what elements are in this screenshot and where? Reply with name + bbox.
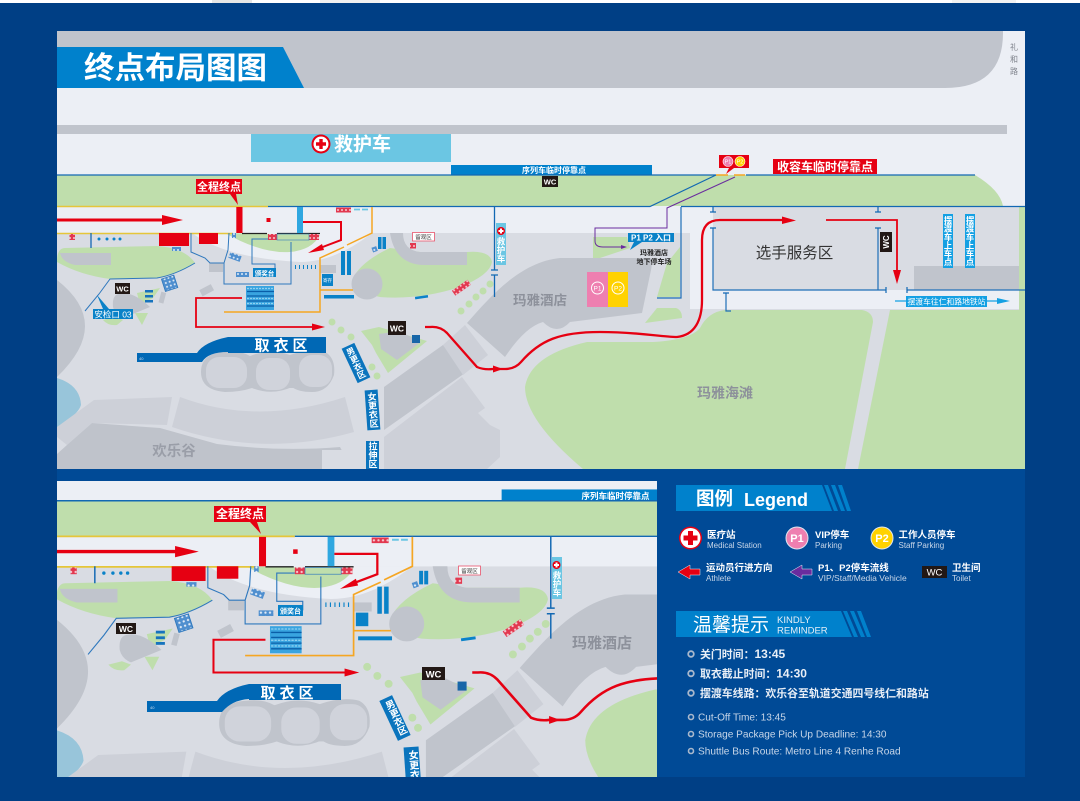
VIP parking: VIP停车 <box>815 529 850 541</box>
left dark buildings <box>57 280 85 377</box>
queue stop label: 序列车临时停靠点 <box>522 165 586 175</box>
underground parking text: 地下停车场 <box>636 257 672 266</box>
podium label: 颁奖台 <box>255 268 275 278</box>
road label <box>1010 42 1018 76</box>
medical station: 医疗站 <box>707 529 736 541</box>
WC sign left: WC <box>116 284 129 294</box>
podium label <box>278 605 303 616</box>
VIP parking: P1 <box>790 533 804 545</box>
English reminder list: Shuttle Bus Route: Metro Line 4 Renhe Road <box>698 746 901 758</box>
purple parking route <box>595 177 735 247</box>
pickup zone label: 取衣区 <box>260 684 318 702</box>
pickup zone label: 取衣区 <box>254 336 312 354</box>
vehicle route: P1、P2停车流线 <box>818 562 889 574</box>
green band <box>57 175 1003 206</box>
green dots <box>328 280 494 380</box>
hotel lawns <box>593 237 630 258</box>
WC vertical sign: WC <box>882 235 891 249</box>
Chinese reminder list: 摆渡车线路：欢乐谷至轨道交通四号线仁和路站 <box>700 686 929 700</box>
ambulance vertical label <box>496 223 506 265</box>
pickup zone label <box>147 684 341 712</box>
blue portable toilets <box>145 290 420 343</box>
road label: 路 <box>1010 66 1018 76</box>
parking entrance label <box>628 233 674 250</box>
shuttle boarding point 2: 摆渡车上车点 <box>965 215 975 267</box>
shuttle direction arrow <box>895 296 1010 307</box>
red zones <box>159 233 189 246</box>
men's changing label: 男更衣区 <box>344 345 368 381</box>
ground <box>57 233 1025 469</box>
VIP parking <box>786 527 850 550</box>
red arrow main straight <box>57 215 183 225</box>
podium label: 颁奖台 <box>280 606 301 616</box>
toilet: WC <box>927 568 943 578</box>
observation label <box>412 232 434 241</box>
security gate label <box>93 295 133 320</box>
ambulance vertical label <box>552 557 562 599</box>
service area ground <box>713 207 1019 290</box>
checker signs <box>70 208 471 296</box>
P1 P2 parking blocks <box>587 272 628 307</box>
finish label: 全程终点 <box>197 180 241 194</box>
podium stands <box>246 286 274 310</box>
Chinese reminder list <box>688 647 929 700</box>
panel: lower map detail <box>56 481 1080 801</box>
queue stop bar <box>451 165 652 175</box>
medical station <box>679 526 762 550</box>
staff parking: Staff Parking <box>898 541 944 550</box>
WC sign left <box>115 283 130 294</box>
finish line <box>236 207 242 233</box>
WC sign left: WC <box>119 624 133 634</box>
centre lawn <box>352 248 492 298</box>
English reminder list: Cut-Off Time: 13:45 <box>698 712 786 724</box>
cyan dashes <box>354 208 368 210</box>
WC sign left <box>116 623 136 634</box>
road label: 和 <box>1010 55 1018 64</box>
English reminder list: Storage Package Pick Up Deadline: 14:30 <box>698 730 887 740</box>
legend header <box>676 485 851 511</box>
staff parking <box>871 527 956 550</box>
red route to shuttle <box>826 220 897 272</box>
underground parking text: 玛雅酒店 <box>640 248 668 257</box>
P1 P2 parking blocks: P2 <box>614 286 622 292</box>
P1 P2 parking blocks: P1 <box>594 286 602 292</box>
women's changing label <box>404 746 422 791</box>
site base plan <box>57 165 1025 469</box>
enlarged plan <box>56 489 1080 801</box>
toilet: 卫生间 <box>952 562 981 574</box>
podium label <box>253 268 276 278</box>
red arrow to pickup <box>196 298 313 327</box>
title banner <box>57 47 304 88</box>
WC sign centre <box>422 667 445 680</box>
ambulance zone <box>251 132 451 162</box>
observation label: 留观区 <box>415 233 432 241</box>
medical station: Medical Station <box>707 541 762 550</box>
reminder header <box>676 611 871 637</box>
toilet <box>922 562 981 583</box>
barrier lines <box>57 175 1025 311</box>
road label: 礼 <box>1010 42 1018 52</box>
finish label: 全程终点 <box>216 506 264 521</box>
title banner: 终点布局图图 <box>84 52 267 86</box>
finish label <box>196 179 242 205</box>
buildings near hotel <box>384 345 465 430</box>
parking entrance label: P1 P2 入口 <box>631 234 671 242</box>
security gate label: 安检口 03 <box>94 310 132 320</box>
WC sign road: WC <box>544 178 557 186</box>
vehicle route: VIP/Staff/Media Vehicle <box>818 573 907 583</box>
reminder header: KINDLY <box>777 615 811 626</box>
WC sign centre: WC <box>426 670 442 680</box>
reminder header: REMINDER <box>777 626 828 636</box>
finish label <box>214 506 266 534</box>
panel: legend <box>676 485 981 583</box>
ambulance vertical label: 救护车 <box>552 571 562 598</box>
red athlete route <box>425 220 782 369</box>
athlete service area label: 选手服务区 <box>756 244 833 262</box>
WC sign centre: WC <box>390 324 404 334</box>
blue tent columns <box>98 237 428 299</box>
hotel building <box>467 258 652 357</box>
finish arc plaza <box>192 233 372 262</box>
orange fence <box>224 207 372 312</box>
pickup zone label <box>137 336 326 362</box>
ambulance vertical label: 救护车 <box>496 237 506 264</box>
storage service mini sign: 寄存 <box>323 277 332 284</box>
toilet: Toilet <box>952 574 971 583</box>
panel: upper map <box>57 31 1025 469</box>
red arrow finish turn <box>303 222 341 248</box>
English reminder list <box>688 712 901 758</box>
cyan gantry <box>297 207 303 233</box>
collection bus stop: 收容车临时停靠点 <box>777 159 873 174</box>
road: top grey band <box>57 31 1003 88</box>
P1 P2 red sign: P1 <box>725 160 731 166</box>
women's changing label: 女更衣区 <box>366 391 379 428</box>
stretching label: 拉伸区 <box>368 440 378 468</box>
WC island centre <box>361 327 427 373</box>
VIP parking: Parking <box>815 541 842 550</box>
hotel label: 玛雅酒店 <box>513 292 567 308</box>
Chinese reminder list: 取衣截止时间：14:30 <box>700 666 807 680</box>
pickup zone label: 40 <box>139 356 144 361</box>
road: grey strip <box>57 125 1007 134</box>
pickup building lobes <box>201 351 334 392</box>
staff parking: 工作人员停车 <box>898 529 956 541</box>
staff parking: P2 <box>875 533 889 545</box>
beach lawn <box>525 310 873 469</box>
P1 P2 red sign <box>719 155 749 174</box>
ambulance zone: 救护车 <box>334 132 391 156</box>
panel: reminder <box>676 611 929 758</box>
WC island left <box>103 288 160 325</box>
men's changing label: 男更衣区 <box>382 698 409 738</box>
underground parking text <box>636 248 672 266</box>
WC sign centre <box>388 321 406 335</box>
hotel label: 玛雅酒店 <box>572 635 632 652</box>
Happy Valley label: 欢乐谷 <box>152 443 196 460</box>
legend header: 图例 <box>696 488 733 509</box>
shuttle direction arrow: 摆渡车往仁和路地铁站 <box>908 296 986 306</box>
beach label: 玛雅海滩 <box>697 385 753 401</box>
lower buildings <box>57 397 172 445</box>
athlete direction: Athlete <box>706 574 731 583</box>
Chinese reminder list: 关门时间：13:45 <box>700 647 785 661</box>
observation label <box>458 566 480 575</box>
WC sign road <box>542 176 558 187</box>
legend header: Legend <box>744 490 808 510</box>
athlete direction <box>678 562 773 583</box>
P1 P2 red sign: P2 <box>737 160 743 166</box>
women's changing label: 女更衣区 <box>406 748 421 790</box>
shuttle boarding point 1: 摆渡车上车点 <box>943 215 953 267</box>
vehicle route <box>790 562 907 583</box>
observation label: 留观区 <box>461 567 478 575</box>
athlete direction: 运动员行进方向 <box>706 562 773 574</box>
WC vertical sign <box>880 232 892 252</box>
queue stop label: 序列车临时停靠点 <box>581 491 650 501</box>
reminder header: 温馨提示 <box>693 614 769 636</box>
pickup zone label: 40 <box>150 705 155 710</box>
